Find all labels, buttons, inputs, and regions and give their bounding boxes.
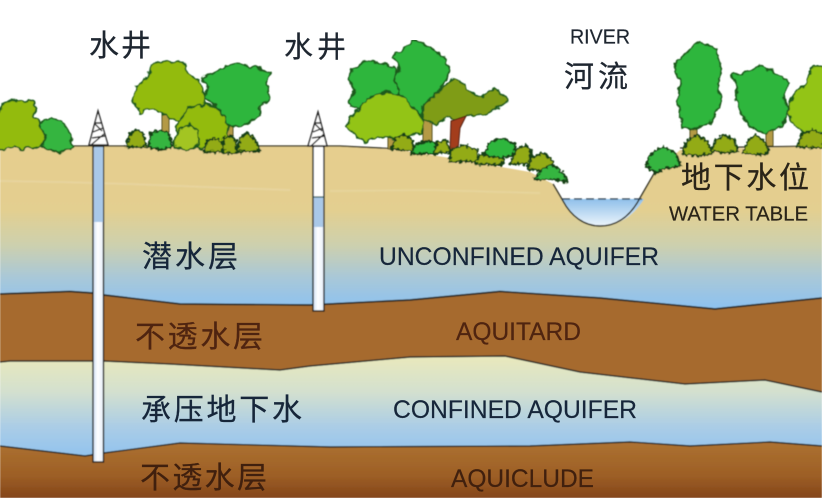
label: water table Chinese: 地下水位	[681, 162, 809, 195]
label: aquiclude English: AQUICLUDE	[451, 465, 594, 493]
bushes near first trees	[126, 130, 260, 153]
icon: well tower 1	[89, 111, 108, 145]
label: unconfined aquifer Chinese: 潜水层	[142, 241, 238, 274]
icon: well tower 2	[308, 112, 327, 146]
bushes	[126, 130, 822, 182]
tree group: lime and green	[133, 61, 270, 151]
label: confined aquifer Chinese: 承压地下水	[141, 394, 302, 427]
trunk: red tree	[450, 116, 466, 150]
tree trunks	[162, 112, 773, 149]
label: water table English: WATER TABLE	[669, 204, 808, 226]
layer: unconfined aquifer and sand	[0, 146, 822, 310]
tall tree	[675, 40, 721, 130]
river	[553, 172, 655, 226]
layer: aquitard	[0, 292, 822, 392]
label: well 2: 水井	[284, 31, 346, 64]
layer: aquiclude	[0, 442, 822, 498]
label: aquitard English: AQUITARD	[456, 318, 581, 346]
bushes on the left river bank	[391, 134, 568, 182]
label: aquiclude Chinese: 不透水层	[140, 462, 267, 495]
bush on the right river bank	[646, 147, 681, 173]
left shrubs	[0, 100, 73, 153]
well 1	[93, 147, 104, 462]
label: unconfined aquifer English: UNCONFINED AQUIFER	[379, 243, 659, 271]
label: river English: RIVER	[570, 26, 630, 48]
label: aquitard Chinese: 不透水层	[135, 321, 263, 354]
tree: right middle	[731, 65, 789, 134]
tree: right edge	[787, 67, 822, 134]
label: river Chinese: 河流	[564, 61, 628, 94]
tree foliage	[0, 40, 822, 153]
ground line	[0, 146, 822, 149]
bushes right side	[682, 130, 822, 156]
well 2	[313, 147, 324, 311]
layer: confined aquifer	[0, 356, 822, 456]
tree group: riverside left	[347, 40, 509, 142]
label: confined aquifer English: CONFINED AQUIFER	[393, 396, 637, 424]
label: well 1: 水井	[89, 30, 151, 63]
